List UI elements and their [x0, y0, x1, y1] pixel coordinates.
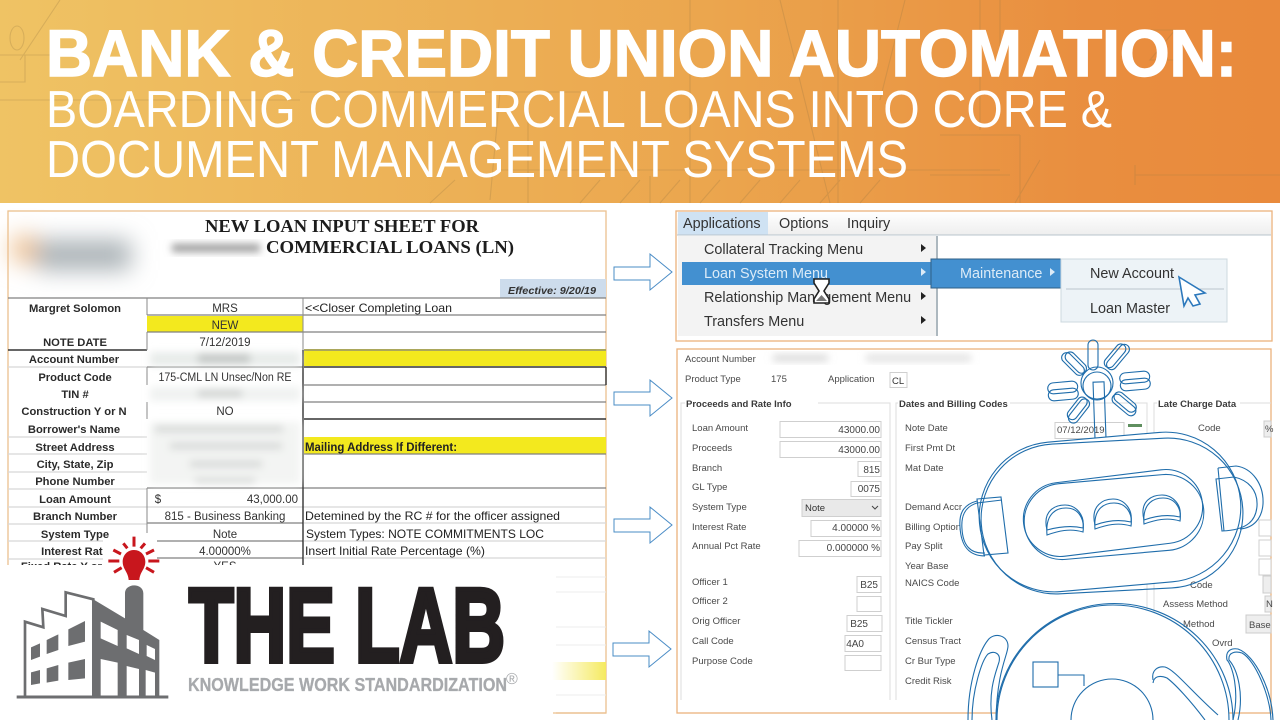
- robot chest button: [1033, 662, 1058, 687]
- middle column values: Note: [213, 529, 237, 541]
- left column labels: Construction Y or N: [21, 406, 127, 418]
- middle column values: YES: [213, 561, 237, 573]
- arrow: to officer fields: [613, 631, 671, 667]
- header banner: [0, 0, 1280, 203]
- yellow highlights: [147, 316, 606, 454]
- sheet heading: COMMERCIAL LOANS (LN): [266, 237, 514, 257]
- left column labels: System Type: [41, 529, 109, 541]
- proceeds and rate fields: Interest Rate: [692, 522, 746, 533]
- proceeds and rate fields: Branch: [692, 463, 722, 474]
- new account submenu: [1061, 259, 1227, 322]
- robot inner arm: [1153, 667, 1218, 720]
- account row: Product Type: [685, 374, 741, 385]
- late charge fields: Code: [1190, 580, 1213, 591]
- menu bar: Options: [779, 216, 829, 232]
- panel: loan entry form: [677, 349, 1274, 713]
- left column labels: Fixed Rate Y or N: [21, 561, 113, 573]
- late charge fields: Ovrd: [1212, 638, 1233, 649]
- blurred bank logo: [12, 236, 131, 270]
- right column notes: <<Closer Completing Loan: [305, 301, 452, 315]
- sheet heading: NEW LOAN INPUT SHEET FOR: [205, 216, 479, 236]
- late charge fields: Base: [1249, 620, 1271, 631]
- late charge fields: Code: [1198, 423, 1221, 434]
- middle column values: 4.00000%: [199, 546, 251, 558]
- dates and billing fields: Billing Option: [905, 522, 961, 533]
- left column labels: Phone Number: [35, 476, 115, 488]
- logo wordmark: THE LAB: [189, 568, 505, 684]
- dropdown menu: Transfers Menu: [704, 314, 804, 330]
- robot eyes: [1046, 495, 1180, 535]
- effective date tag: Effective: 9/20/19: [508, 285, 596, 297]
- new account submenu: Loan Master: [1090, 301, 1170, 317]
- middle column values: NEW: [212, 320, 239, 332]
- proceeds and rate fields: Annual Pct Rate: [692, 541, 761, 552]
- robot left arm: [968, 635, 1008, 720]
- logo: The Lab: [17, 537, 518, 697]
- proceeds and rate fields: Call Code: [692, 636, 734, 647]
- account row: Application: [828, 374, 874, 385]
- dates and billing fields: [905, 422, 1142, 687]
- group box outlines: [681, 403, 1271, 700]
- menu bar: Applications: [683, 216, 761, 232]
- dates and billing fields: Census Tract: [905, 636, 961, 647]
- dates and billing fields: Demand Accr: [905, 502, 962, 513]
- right column notes: Insert Initial Rate Percentage (%): [305, 544, 485, 558]
- proceeds and rate fields: 815: [863, 465, 880, 476]
- sheet heading: [172, 216, 514, 257]
- icon: hourglass: [814, 279, 829, 303]
- proceeds and rate fields: Note: [805, 503, 825, 514]
- left column labels: Account Number: [29, 354, 120, 366]
- arrow: sheet to menu: [614, 254, 672, 290]
- left column labels: Street Address: [35, 442, 115, 454]
- left column labels: City, State, Zip: [37, 459, 114, 471]
- registered mark: ®: [506, 671, 518, 688]
- panel: loan input sheet: [8, 211, 606, 713]
- panel: core system menu: [676, 211, 1272, 341]
- middle column values: 175-CML LN Unsec/Non RE: [158, 372, 292, 384]
- middle column values: MRS: [212, 303, 238, 315]
- dropdown menu: [678, 236, 937, 336]
- proceeds and rate fields: Purpose Code: [692, 656, 753, 667]
- middle column values: 43,000.00: [247, 494, 298, 506]
- robot chest dial: [1071, 679, 1153, 720]
- proceeds and rate fields: Proceeds: [692, 443, 732, 454]
- effective date tag: [500, 279, 606, 298]
- left column labels: Loan Amount: [39, 494, 111, 506]
- proceeds and rate fields: Loan Amount: [692, 423, 748, 434]
- proceeds and rate fields: 0075: [858, 484, 880, 495]
- robot visor: [1019, 465, 1207, 563]
- account row: [685, 354, 971, 388]
- left column labels: NOTE DATE: [43, 337, 107, 349]
- proceeds and rate fields: Officer 2: [692, 596, 728, 607]
- section headings: Proceeds and Rate Info: [686, 399, 792, 410]
- dates and billing fields: Year Base: [905, 561, 948, 572]
- proceeds and rate fields: 4A0: [846, 639, 864, 650]
- arrow: to account fields: [614, 380, 672, 416]
- late charge fields: [1163, 421, 1274, 649]
- dates and billing fields: First Pmt Dt: [905, 443, 955, 454]
- title line 2: BOARDING COMMERCIAL LOANS INTO CORE &: [46, 81, 1112, 139]
- middle column values: [155, 303, 298, 573]
- account row: CL: [892, 376, 904, 387]
- late charge fields: %: [1265, 424, 1274, 435]
- dates and billing fields: Mat Date: [905, 463, 944, 474]
- right column notes: Detemined by the RC # for the officer assigned: [305, 509, 560, 523]
- middle column values: NO: [216, 406, 234, 418]
- right column notes: System Types: NOTE COMMITMENTS LOC: [306, 527, 544, 541]
- blurred account details: [150, 352, 300, 484]
- title: [46, 16, 1237, 189]
- left column labels: Product Code: [38, 372, 112, 384]
- proceeds and rate fields: 0.000000 %: [827, 543, 880, 554]
- arrow: to rate fields: [614, 507, 672, 543]
- dates and billing fields: 07/12/2019: [1057, 425, 1105, 436]
- left column labels: Borrower's Name: [28, 424, 120, 436]
- left column labels: Margret Solomon: [29, 303, 121, 315]
- dates and billing fields: NAICS Code: [905, 578, 959, 589]
- dates and billing fields: Title Tickler: [905, 616, 953, 627]
- icon: factory: [17, 585, 168, 697]
- late charge fields: N: [1266, 599, 1273, 610]
- proceeds and rate fields: B25: [850, 619, 868, 630]
- new account submenu: New Account: [1090, 266, 1174, 282]
- proceeds and rate fields: 43000.00: [838, 445, 880, 456]
- title line 1: BANK & CREDIT UNION AUTOMATION:: [46, 16, 1237, 90]
- robot antenna light: [1047, 340, 1151, 438]
- left column labels: TIN #: [61, 389, 89, 401]
- maintenance submenu: Maintenance: [960, 266, 1042, 282]
- dates and billing fields: Cr Bur Type: [905, 656, 956, 667]
- menu bar: [677, 212, 1271, 235]
- icon: cursor: [1179, 277, 1205, 306]
- middle column values: 7/12/2019: [199, 337, 251, 349]
- late charge fields: Assess Method: [1163, 599, 1228, 610]
- left column labels: [21, 303, 127, 573]
- robot ears: [960, 466, 1263, 556]
- account row: Account Number: [685, 354, 756, 365]
- left column labels: Branch Number: [33, 511, 118, 523]
- section headings: Late Charge Data: [1158, 399, 1237, 410]
- robot head: [960, 426, 1263, 598]
- middle column values: 815 - Business Banking: [165, 511, 285, 523]
- proceeds and rate fields: System Type: [692, 502, 747, 513]
- section headings: [686, 399, 1237, 410]
- dates and billing fields: Note Date: [905, 423, 948, 434]
- proceeds and rate fields: [692, 422, 882, 670]
- table rules: [8, 298, 606, 565]
- flow arrows: [613, 254, 672, 667]
- proceeds and rate fields: 4.00000 %: [832, 523, 880, 534]
- proceeds and rate fields: 43000.00: [838, 425, 880, 436]
- menu bar: Inquiry: [847, 216, 891, 232]
- right column notes: Mailing Address If Different:: [305, 442, 457, 454]
- right column notes: [305, 301, 560, 558]
- proceeds and rate fields: B25: [860, 580, 878, 591]
- proceeds and rate fields: Officer 1: [692, 577, 728, 588]
- dropdown menu: Loan System Menu: [704, 266, 828, 282]
- icon: red light bulb: [108, 537, 159, 580]
- dates and billing fields: Pay Split: [905, 541, 943, 552]
- logo backdrop: [0, 540, 606, 720]
- logo tagline: KNOWLEDGE WORK STANDARDIZATION: [188, 675, 507, 695]
- dropdown menu: Relationship Management Menu: [704, 290, 911, 306]
- dropdown menu: Collateral Tracking Menu: [704, 242, 863, 258]
- left column labels: Interest Rate: [41, 546, 109, 558]
- robot body: [968, 604, 1273, 720]
- proceeds and rate fields: GL Type: [692, 482, 727, 493]
- proceeds and rate fields: Orig Officer: [692, 616, 740, 627]
- account row: 175: [771, 374, 787, 385]
- late charge fields: Method: [1183, 619, 1215, 630]
- robot illustration: [960, 340, 1273, 720]
- robot right arm: [1227, 649, 1273, 720]
- maintenance submenu: [931, 259, 1061, 288]
- section headings: Dates and Billing Codes: [899, 399, 1008, 410]
- dates and billing fields: Credit Risk: [905, 676, 952, 687]
- middle column values: $: [155, 494, 162, 506]
- title line 3: DOCUMENT MANAGEMENT SYSTEMS: [46, 131, 908, 189]
